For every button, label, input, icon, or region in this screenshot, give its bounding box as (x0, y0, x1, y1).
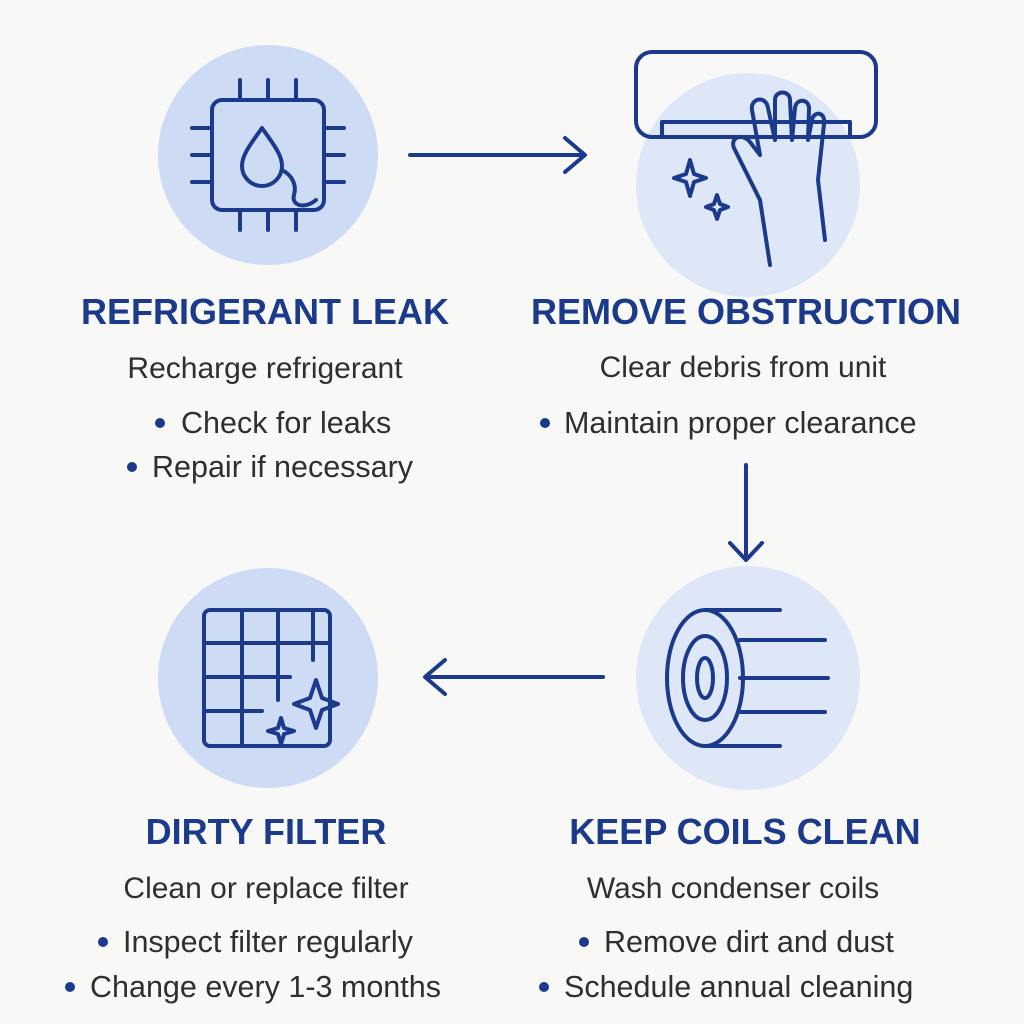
text: refrigerant leak: Repair if necessary (152, 450, 414, 484)
icon: coil (636, 566, 860, 790)
text: remove obstruction (531, 291, 961, 440)
arrow: down (730, 465, 762, 560)
text: refrigerant leak: Recharge refrigerant (127, 352, 403, 385)
text: refrigerant leak: REFRIGERANT LEAK (81, 291, 449, 332)
text: dirty filter: DIRTY FILTER (146, 811, 386, 852)
icon: refrigerant leak chip (158, 45, 378, 265)
text: refrigerant leak: Check for leaks (181, 406, 391, 440)
text: keep coils clean: Wash condenser coils (587, 872, 879, 905)
text: remove obstruction: Maintain proper clearance (564, 406, 917, 440)
text: remove obstruction: REMOVE OBSTRUCTION (531, 291, 961, 332)
text: dirty filter: Inspect filter regularly (123, 925, 414, 959)
arrow: left (425, 660, 603, 694)
text: keep coils clean: Schedule annual cleaning (564, 970, 913, 1004)
text: dirty filter: Change every 1-3 months (90, 970, 441, 1004)
text: keep coils clean: Remove dirt and dust (604, 925, 894, 959)
icon: dirty filter (158, 568, 378, 788)
text: keep coils clean (539, 811, 921, 1004)
icon: AC unit with hand (636, 52, 876, 297)
text: dirty filter (65, 811, 441, 1004)
arrow: right (410, 138, 585, 172)
text: refrigerant leak (81, 291, 449, 484)
text: remove obstruction: Clear debris from unit (600, 351, 887, 384)
text: keep coils clean: KEEP COILS CLEAN (569, 811, 921, 852)
text: dirty filter: Clean or replace filter (123, 872, 409, 905)
